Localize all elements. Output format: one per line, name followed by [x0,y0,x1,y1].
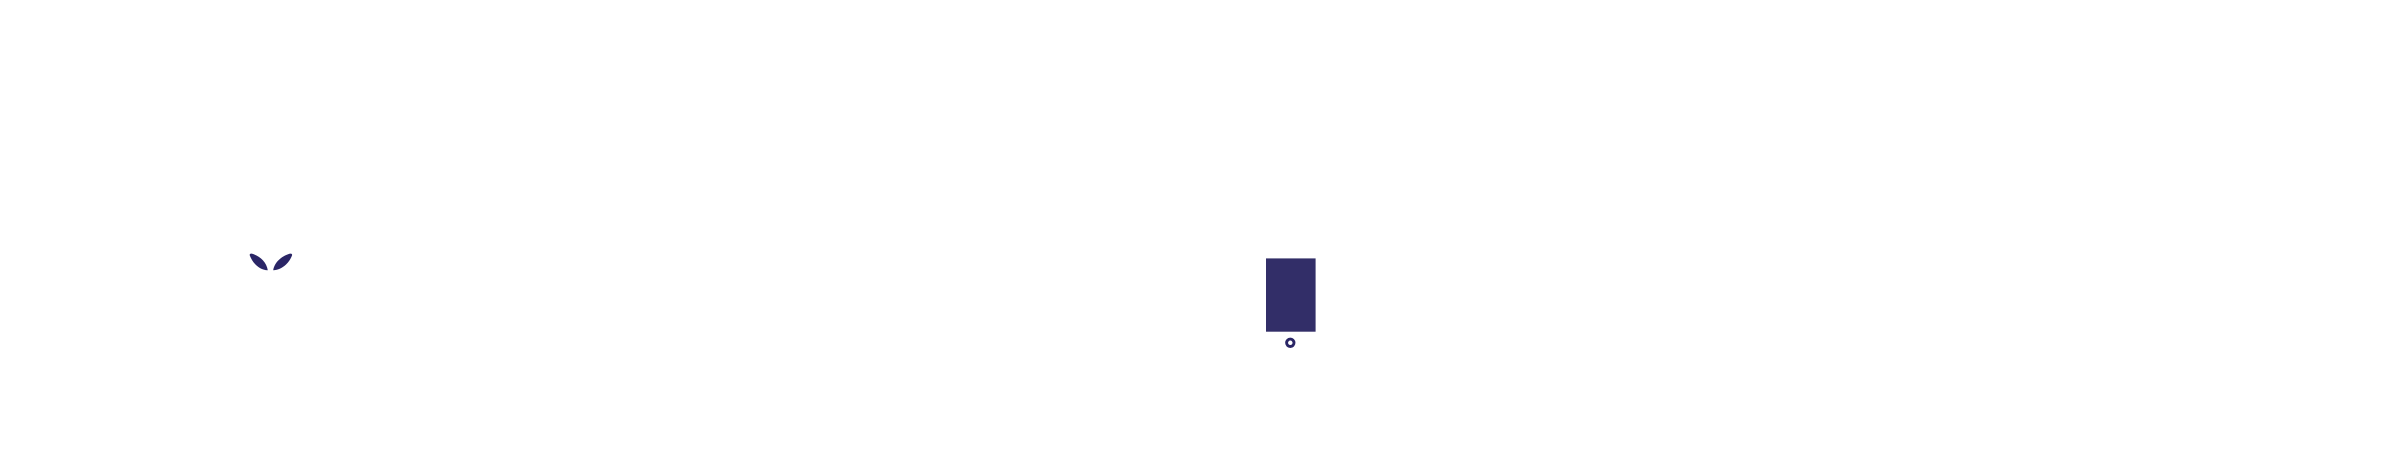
left leaf [250,254,268,270]
right leaf [273,254,292,270]
icon: pair of leaves [250,254,292,270]
icon: small ring marker [1287,339,1294,346]
bar [1266,258,1316,332]
